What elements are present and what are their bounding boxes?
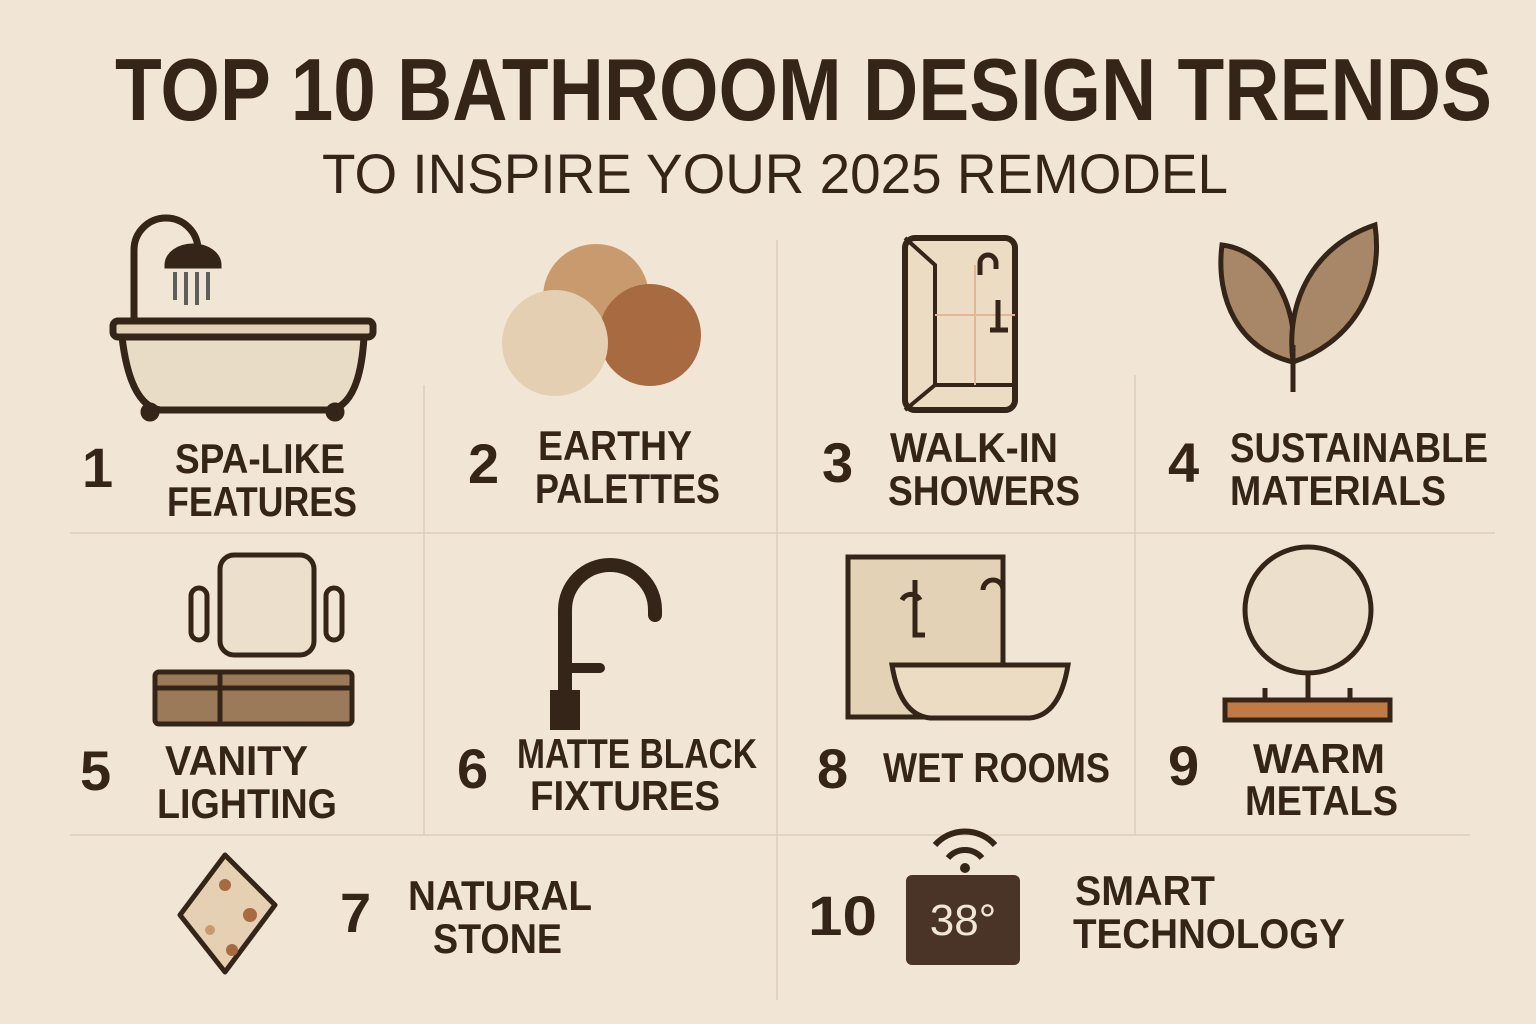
label 7: NATURAL [408, 872, 592, 919]
label 7 [340, 872, 592, 962]
icon: bathtub [113, 218, 373, 418]
label 3: 3 [822, 431, 853, 494]
label 10: TECHNOLOGY [1073, 910, 1345, 957]
label 4: 4 [1168, 431, 1199, 494]
label 10: 10 [808, 884, 877, 947]
label 3: WALK-IN [890, 424, 1058, 471]
label 5: LIGHTING [157, 780, 337, 827]
label 5 [80, 737, 337, 827]
label 6: 6 [457, 737, 488, 800]
icon: vanity [155, 555, 352, 724]
label 2: PALETTES [535, 465, 720, 512]
label 7: 7 [340, 881, 371, 944]
label 8: 8 [817, 737, 848, 800]
icon: faucet [550, 565, 655, 730]
label 7: STONE [433, 915, 562, 962]
subtitle: TO INSPIRE YOUR 2025 REMODEL [322, 142, 1228, 205]
label 4: MATERIALS [1230, 467, 1446, 514]
label 3 [822, 424, 1080, 514]
label 9: METALS [1245, 777, 1398, 824]
label 1: 1 [82, 436, 113, 499]
label 6: MATTE BLACK [517, 730, 757, 777]
icon: wet room [848, 557, 1068, 718]
label 1 [82, 435, 357, 525]
icon: leaf [1221, 225, 1377, 392]
label 4: SUSTAINABLE [1230, 424, 1488, 471]
icon: walk-in shower [905, 238, 1015, 410]
icon: stone [180, 855, 275, 972]
label 10 [808, 867, 1345, 957]
label 9: WARM [1253, 735, 1385, 782]
icon: palette circles [502, 244, 701, 396]
label 5: VANITY [165, 737, 308, 784]
label 4 [1168, 424, 1488, 514]
label 2: 2 [468, 432, 499, 495]
label 1: FEATURES [167, 478, 357, 525]
icon: smart thermostat: 38° [930, 896, 996, 945]
label 2: EARTHY [538, 422, 692, 469]
label 5: 5 [80, 739, 111, 802]
label 2 [468, 422, 720, 512]
label 6: FIXTURES [530, 772, 720, 819]
icon: smart thermostat [906, 831, 1020, 965]
label 9 [1168, 734, 1398, 824]
label 6 [457, 730, 757, 819]
icon: round mirror [1225, 547, 1390, 720]
label 1: SPA-LIKE [175, 435, 345, 482]
label 3: SHOWERS [888, 467, 1080, 514]
label 8 [817, 737, 1110, 800]
label 9: 9 [1168, 734, 1199, 797]
label 8: WET ROOMS [883, 744, 1110, 791]
label 10: SMART [1075, 867, 1215, 914]
